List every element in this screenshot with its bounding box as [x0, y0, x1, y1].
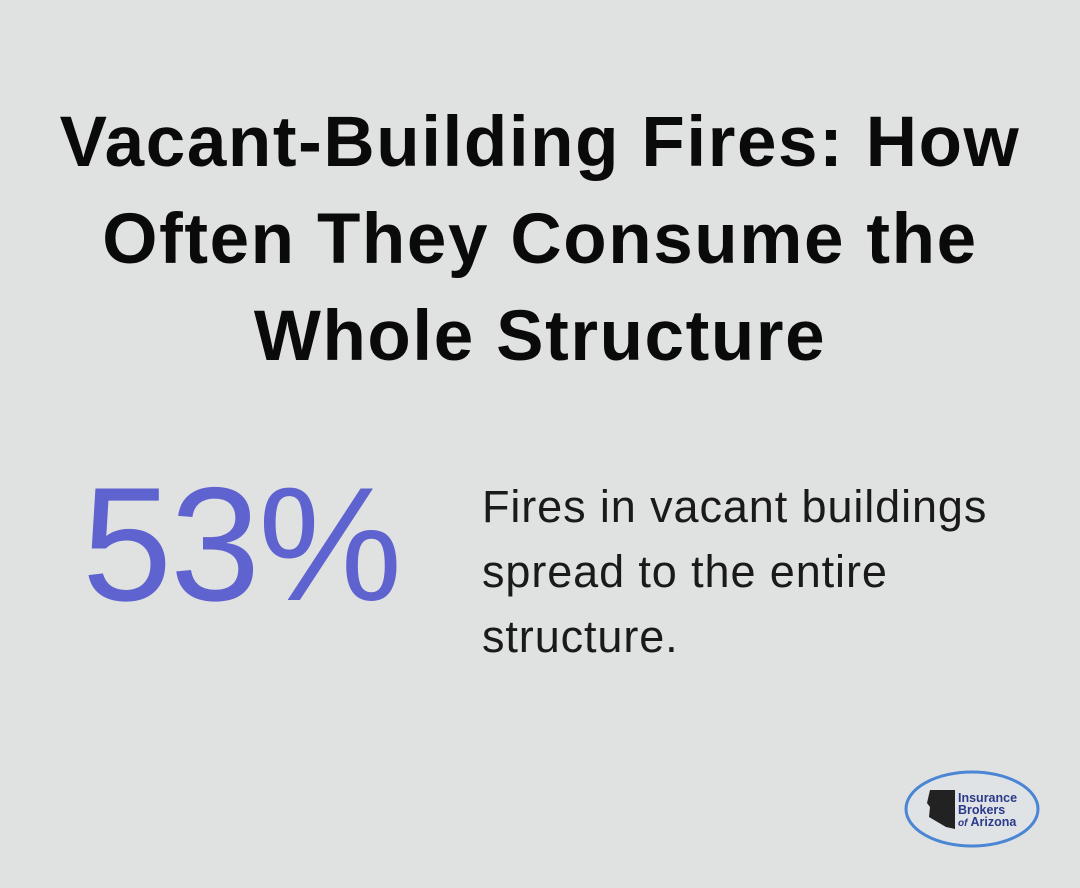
title	[60, 103, 1020, 376]
description text	[482, 481, 987, 662]
title: Whole Structure	[254, 297, 826, 376]
logo: Insurance Brokers of Arizona	[904, 770, 1040, 848]
description text: spread to the entire	[482, 546, 888, 597]
logo: Insurance Brokers of Arizona: Brokers	[958, 803, 1005, 817]
big stat: 53%: 53%	[82, 454, 400, 635]
title: Often They Consume the	[102, 200, 978, 279]
description text: Fires in vacant buildings	[482, 481, 987, 532]
logo: Insurance Brokers of Arizona: Insurance	[958, 791, 1017, 805]
logo: Insurance Brokers of Arizona: of Arizona	[958, 815, 1017, 829]
description text: structure.	[482, 611, 679, 662]
title: Vacant-Building Fires: How	[60, 103, 1020, 182]
